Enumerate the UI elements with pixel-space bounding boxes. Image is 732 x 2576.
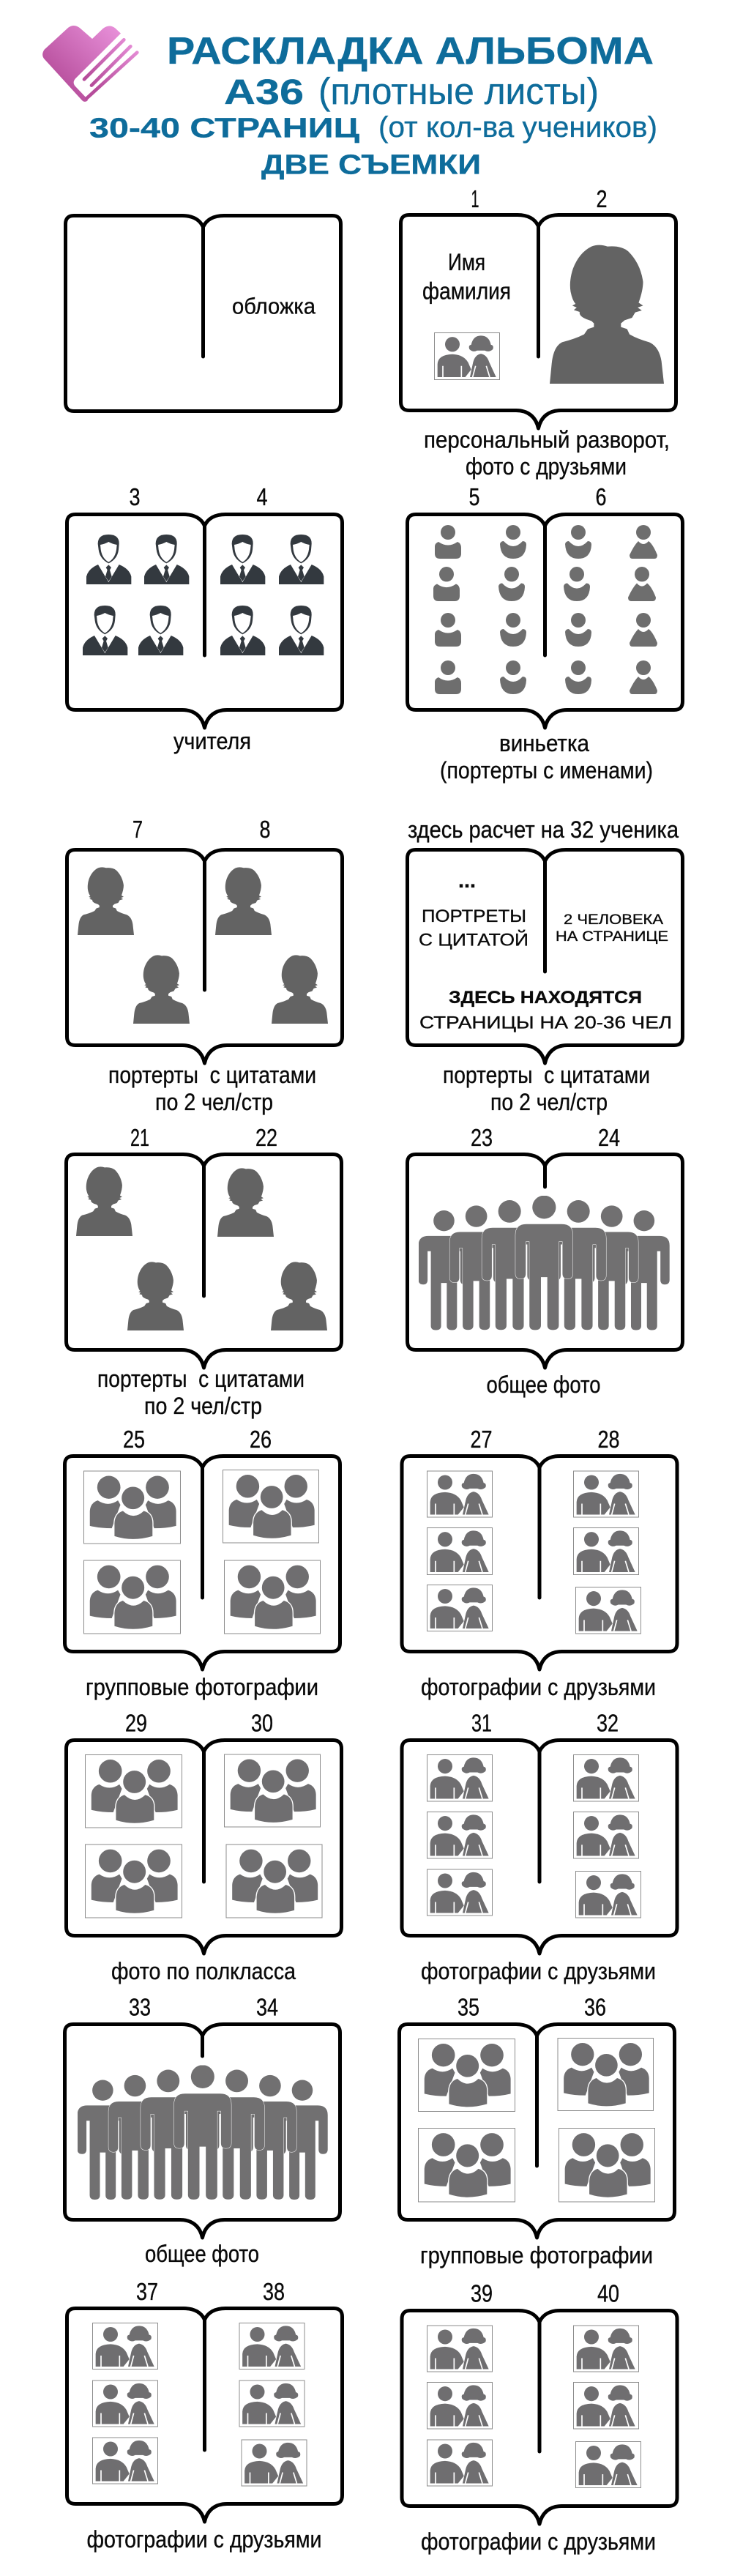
panel: pages 31-32 photos with friends: 32	[597, 1709, 619, 1737]
panel: pages 39-40 photos with friends: 40	[597, 2280, 619, 2307]
panel: pages 7-8 portraits: портерты с цитатами	[108, 1062, 316, 1088]
panel: pages 35-36 group photos: групповые фотографии	[420, 2242, 653, 2268]
panel: pages 7-8 portraits: 7	[132, 816, 143, 843]
panel: pages 37-38 photos with friends: 38	[263, 2278, 285, 2305]
panel: pages 39-40 photos with friends: фотографии с друзьями	[421, 2528, 656, 2555]
panel: pages 1-2 personal spread: персональный разворот,	[424, 426, 670, 453]
panel: pages 25-26 group photos: групповые фотографии	[86, 1674, 318, 1700]
panel: pages 3-4 teachers: 3	[129, 483, 141, 510]
panel: 32 students note spread: ...	[458, 868, 476, 893]
panel: pages 23-24 class photo: 23	[471, 1124, 493, 1151]
panel: 32 students note spread: С ЦИТАТОЙ	[419, 930, 529, 950]
panel: 32 students note spread: СТРАНИЦЫ НА 20-36 ЧЕЛ	[419, 1013, 672, 1032]
panel: pages 33-34 class photo: 33	[129, 1993, 151, 2021]
panel: 32 students note spread: по 2 чел/стр	[490, 1089, 608, 1115]
panel: pages 29-30 half-class photos: 30	[251, 1709, 273, 1737]
panel: pages 21-22 portraits: по 2 чел/стр	[144, 1393, 262, 1419]
panel: pages 27-28 photos with friends: 28	[597, 1426, 619, 1453]
panel: 32 students note spread: 2 ЧЕЛОВЕКА	[564, 912, 663, 928]
panel: pages 5-6 vignette: 6	[596, 483, 606, 510]
panel: pages 3-4 teachers: 4	[256, 483, 268, 510]
panel: pages 35-36 group photos: 35	[458, 1993, 479, 2021]
panel: pages 35-36 group photos	[400, 1993, 675, 2268]
panel: pages 25-26 group photos	[64, 1426, 340, 1700]
panel: pages 1-2 personal spread	[401, 185, 676, 480]
panel: 32 students note spread: портерты с цитатами	[443, 1062, 650, 1088]
panel: pages 31-32 photos with friends	[402, 1709, 677, 1984]
title: А36	[224, 73, 304, 112]
panel: pages 31-32 photos with friends: фотографии с друзьями	[421, 1958, 656, 1984]
panel: pages 33-34 class photo	[64, 1993, 340, 2267]
panel: pages 29-30 half-class photos: 29	[125, 1709, 147, 1737]
panel: pages 27-28 photos with friends	[402, 1426, 677, 1700]
panel: pages 23-24 class photo: 24	[598, 1124, 620, 1151]
title	[89, 30, 657, 180]
panel: pages 39-40 photos with friends: 39	[471, 2280, 493, 2307]
panel: pages 29-30 half-class photos: фото по полкласса	[111, 1958, 296, 1984]
panel: cover: обложка	[232, 293, 316, 319]
panel: pages 35-36 group photos: 36	[584, 1993, 606, 2021]
panel: pages 21-22 portraits	[66, 1124, 341, 1419]
panel: pages 27-28 photos with friends: фотографии с друзьями	[421, 1674, 656, 1700]
panel: pages 7-8 portraits	[67, 816, 343, 1115]
panel: pages 1-2 personal spread: 2	[596, 185, 608, 212]
panel: pages 25-26 group photos: 26	[250, 1426, 272, 1453]
panel: pages 5-6 vignette: 5	[468, 483, 480, 510]
panel: pages 1-2 personal spread: фото с друзьями	[466, 453, 627, 480]
panel: pages 5-6 vignette: виньетка	[499, 730, 589, 756]
panel: pages 3-4 teachers	[67, 483, 343, 754]
panel: pages 37-38 photos with friends	[67, 2278, 343, 2553]
title: ДВЕ СЪЕМКИ	[261, 149, 481, 180]
panel: pages 33-34 class photo: 34	[256, 1993, 278, 2021]
title: РАСКЛАДКА АЛЬБОМА	[167, 30, 654, 72]
panel: pages 5-6 vignette	[407, 483, 682, 783]
panel: pages 7-8 portraits: 8	[259, 816, 271, 843]
panel: pages 23-24 class photo	[407, 1124, 682, 1398]
panel: pages 39-40 photos with friends	[402, 2280, 677, 2555]
title: 30-40 СТРАНИЦ	[89, 113, 359, 144]
panel: 32 students note spread: НА СТРАНИЦЕ	[556, 928, 668, 945]
title: (от кол-ва учеников)	[378, 111, 657, 144]
panel: pages 21-22 portraits: 21	[130, 1124, 149, 1151]
panel: pages 31-32 photos with friends: 31	[471, 1709, 492, 1737]
panel: pages 29-30 half-class photos	[66, 1709, 341, 1984]
panel: pages 1-2 personal spread: Имя	[448, 249, 485, 275]
panel: cover	[66, 215, 341, 412]
panel: 32 students note spread: ПОРТРЕТЫ	[422, 907, 526, 926]
panel: pages 21-22 portraits: портерты с цитатами	[97, 1366, 305, 1392]
panel: pages 5-6 vignette: (портерты с именами)	[440, 757, 653, 783]
title: (плотные листы)	[318, 70, 599, 112]
panel: pages 7-8 portraits: по 2 чел/стр	[155, 1089, 273, 1115]
panel: pages 37-38 photos with friends: фотографии с друзьями	[86, 2526, 322, 2553]
panel: pages 23-24 class photo: общее фото	[486, 1371, 600, 1398]
panel: pages 27-28 photos with friends: 27	[470, 1426, 492, 1453]
panel: pages 33-34 class photo: общее фото	[145, 2241, 259, 2267]
panel: pages 21-22 portraits: 22	[255, 1124, 277, 1151]
panel: pages 3-4 teachers: учителя	[173, 728, 251, 754]
panel: pages 37-38 photos with friends: 37	[136, 2278, 158, 2305]
panel: 32 students note spread: ЗДЕСЬ НАХОДЯТСЯ	[449, 988, 642, 1008]
panel: pages 1-2 personal spread: 1	[471, 185, 479, 212]
panel: 32 students note spread: здесь расчет на 32 ученика	[408, 816, 679, 843]
panel: 32 students note spread	[407, 816, 682, 1115]
panel: pages 1-2 personal spread: фамилия	[422, 278, 511, 305]
icon: heart book logo	[42, 26, 137, 102]
panel: pages 25-26 group photos: 25	[123, 1426, 145, 1453]
